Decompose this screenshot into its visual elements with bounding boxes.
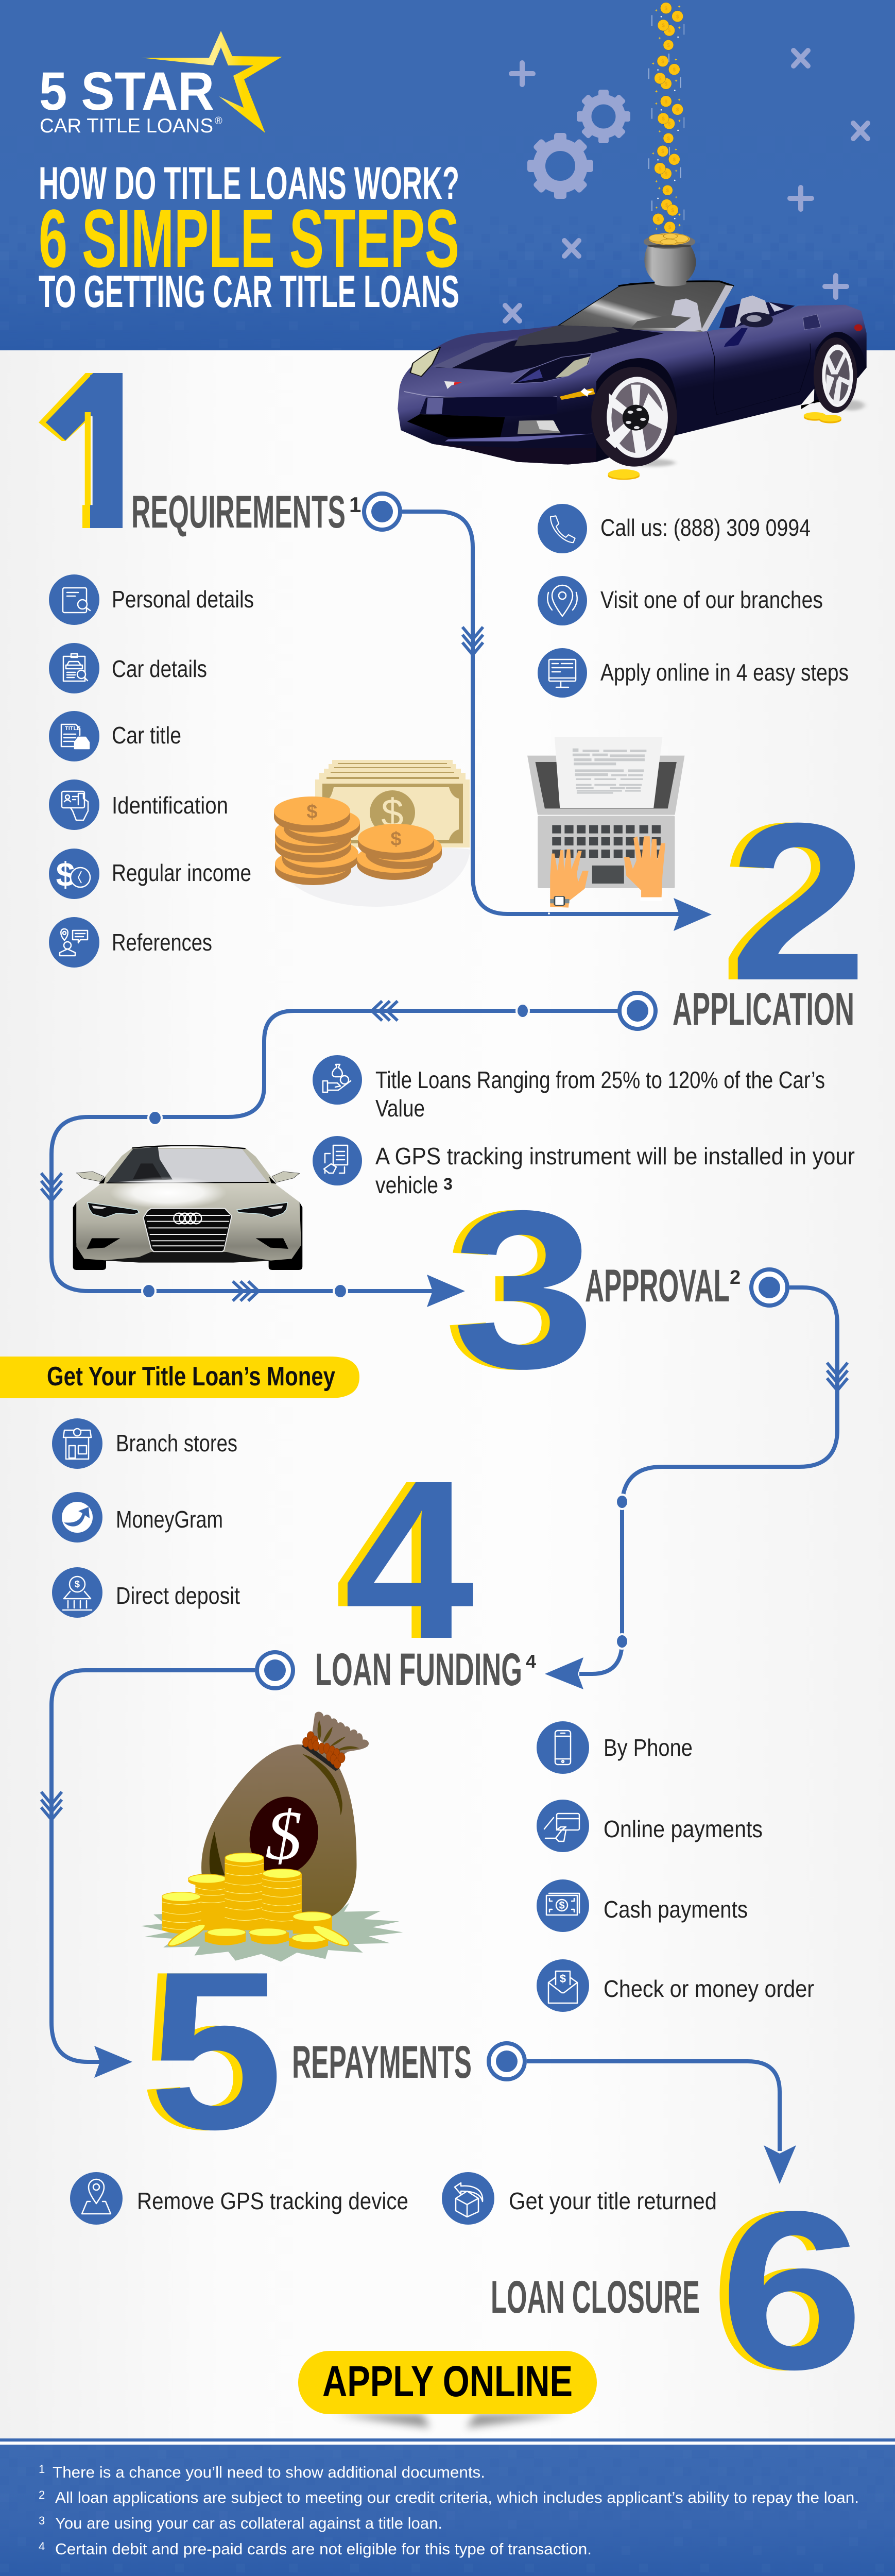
coin dollar signs: $ <box>668 28 671 34</box>
windshield <box>107 1149 268 1182</box>
path dots <box>142 1004 529 1298</box>
item: remove GPS <box>70 2172 408 2225</box>
rope <box>302 1732 345 1771</box>
heading: repayments: REPAYMENTS <box>292 2036 472 2088</box>
button: apply online <box>298 2351 597 2428</box>
item: references: References <box>112 929 212 956</box>
big number 2: 2 <box>729 776 868 1027</box>
heading: loan closure: LOAN CLOSURE <box>491 2271 700 2323</box>
sack body <box>201 1744 356 1923</box>
item: regular income <box>49 849 251 899</box>
ring marker <box>751 1269 787 1306</box>
heading: requirements: 1 <box>349 493 361 517</box>
title: TO GETTING CAR TITLE LOANS <box>39 266 459 317</box>
coin dollar signs <box>657 6 679 231</box>
illustration: cash and coin stacks <box>274 760 470 907</box>
coin dollar signs: $ <box>665 6 668 11</box>
logo wordmark: 5 STAR <box>39 61 214 122</box>
panel: closure steps <box>70 2172 717 2225</box>
coins right stack: $ <box>390 828 402 850</box>
decorative plus and x marks <box>505 50 868 321</box>
illustration: coins falling into pot <box>648 3 684 233</box>
coin stacks <box>162 1853 351 1950</box>
item: regular income: Regular income <box>112 859 251 886</box>
item: direct deposit: Direct deposit <box>116 1582 240 1609</box>
chin splitter <box>445 434 593 442</box>
big number 6: 6 <box>719 2164 864 2417</box>
coin dollar signs: $ <box>666 188 669 194</box>
front wheel <box>591 367 677 467</box>
banner: get your title loan's money: Get Your Title Loan’s Money <box>47 1362 335 1392</box>
icon: logo star <box>141 31 282 133</box>
coin dollar signs: $ <box>665 99 668 105</box>
door handle <box>803 314 821 330</box>
coin dollar signs: $ <box>673 67 676 73</box>
grille <box>143 1209 232 1251</box>
item: GPS tracking: vehicle <box>375 1172 438 1198</box>
footnote 3: You are using your car as collateral against a title loan. <box>55 2514 442 2532</box>
item: branch stores <box>52 1418 237 1469</box>
emblem <box>444 381 462 389</box>
front wheel arch <box>596 358 677 462</box>
item: visit branches <box>538 576 823 625</box>
left headlight <box>410 347 440 377</box>
panel: requirements list <box>49 574 254 968</box>
item: online payments: Online payments <box>604 1816 763 1842</box>
item: apply online <box>538 648 849 698</box>
paper <box>555 737 662 808</box>
rear wheel <box>814 337 857 413</box>
item: car title: Car title <box>112 722 181 749</box>
big number 4: 4 <box>344 1433 476 1686</box>
item: title returned: Get your title returned <box>509 2188 717 2214</box>
banknotes: $ <box>381 790 404 836</box>
footer rule <box>0 2438 895 2442</box>
dollar label <box>241 1790 326 1882</box>
coin dollar signs: $ <box>667 136 670 142</box>
mirrors <box>76 1172 300 1183</box>
button: apply online: APPLY ONLINE <box>322 2357 573 2405</box>
footnote 1: There is a chance you’ll need to show additional documents. <box>53 2463 485 2481</box>
wristwatch <box>550 896 570 905</box>
item: car title <box>49 711 181 761</box>
item: call us <box>538 504 811 553</box>
panel: repayment options <box>537 1721 814 2012</box>
icon: gears <box>527 90 630 199</box>
wheels <box>73 1202 302 1270</box>
heading: approval <box>585 1260 741 1311</box>
item: apply online: Apply online in 4 easy steps <box>600 659 849 686</box>
big number 2: 2 <box>720 776 858 1027</box>
coin dollar signs: $ <box>673 157 676 163</box>
button shadow <box>335 2414 566 2428</box>
big number 5: 5 <box>149 1925 283 2176</box>
coin dollar signs: $ <box>676 14 679 20</box>
heading: loan funding: 4 <box>526 1651 536 1672</box>
connector: application to approval <box>41 993 656 1307</box>
banner: get your title loan's money <box>0 1357 359 1398</box>
coins left stack <box>274 796 360 885</box>
coin dollar signs: $ <box>668 225 672 231</box>
icon: dollar and clock: $ <box>56 855 75 893</box>
big number 6: 6 <box>710 2164 855 2417</box>
heading: requirements <box>131 486 361 537</box>
door line <box>708 332 811 415</box>
big number 1: 1 <box>36 325 170 577</box>
interior <box>719 302 795 328</box>
connector: loan funding to repayments <box>41 1652 293 2078</box>
title: HOW DO TITLE LOANS WORK? <box>39 157 459 209</box>
item: personal details <box>49 574 254 625</box>
ring marker <box>489 2043 525 2079</box>
fog light <box>518 420 561 434</box>
item: direct deposit: $ <box>75 1579 80 1589</box>
coin dollar signs: $ <box>672 208 675 214</box>
panel: funding options <box>52 1418 240 1618</box>
mirror <box>724 328 748 347</box>
footer panel <box>0 2445 895 2576</box>
coin dollar signs: $ <box>662 116 665 122</box>
ring marker <box>257 1652 293 1688</box>
illustration: laptop with hands <box>527 737 684 908</box>
hood highlight <box>110 1176 227 1209</box>
logo: 5 Star Car Title Loans <box>39 31 282 137</box>
item: car details <box>49 643 207 693</box>
tail light <box>854 324 863 331</box>
path dots <box>616 1495 628 1649</box>
right headlight <box>511 353 592 384</box>
big number 3: 3 <box>452 1163 595 1415</box>
body <box>76 1182 301 1262</box>
item: moneygram <box>52 1492 223 1543</box>
item: check or money order: Check or money order <box>604 1975 814 2002</box>
coin dollar signs: $ <box>661 149 664 155</box>
indicator <box>559 388 595 400</box>
item: cash payments: $ <box>559 1900 565 1911</box>
coin dollar signs: $ <box>668 122 671 127</box>
item: title loan range <box>313 1055 825 1122</box>
connector: requirements to application <box>364 494 712 931</box>
heading: loan funding: LOAN FUNDING <box>315 1643 522 1695</box>
coins left stack: $ <box>306 801 318 823</box>
panel: application options <box>538 504 849 698</box>
registered mark: ® <box>215 115 222 127</box>
logo tagline: CAR TITLE LOANS <box>40 115 213 137</box>
item: check or money order <box>537 1959 814 2012</box>
item: by phone: By Phone <box>604 1734 693 1761</box>
roof and pillars <box>99 1148 277 1184</box>
coin dollar signs: $ <box>662 23 665 29</box>
coin dollar signs: $ <box>659 166 662 172</box>
windshield <box>559 281 733 333</box>
coin dollar signs: $ <box>657 217 660 223</box>
footnote 2: 2 <box>39 2488 45 2501</box>
item: car title: TITLE <box>65 725 81 732</box>
header band <box>0 0 895 350</box>
burst <box>141 1903 403 1962</box>
lower lip <box>103 1252 271 1263</box>
footnote 3: 3 <box>39 2514 45 2527</box>
big number 3: 3 <box>444 1163 587 1415</box>
big number 1: 1 <box>28 325 163 577</box>
item: branch stores: Branch stores <box>116 1430 237 1456</box>
coin dollar signs: $ <box>661 59 664 64</box>
numeral flag shading <box>39 373 93 441</box>
coin dollar signs: $ <box>676 107 679 113</box>
coin dollar signs: $ <box>667 43 670 48</box>
headlights <box>88 1202 287 1217</box>
coins right stack <box>357 824 442 880</box>
item: call us: Call us: (888) 309 0994 <box>600 514 811 541</box>
illustration: convertible car <box>398 233 867 480</box>
footnote 1: 1 <box>39 2463 45 2476</box>
heading: requirements: REQUIREMENTS <box>131 486 346 537</box>
item: visit branches: Visit one of our branches <box>600 586 823 613</box>
item: references <box>49 917 212 968</box>
panel: approval details <box>313 1055 855 1198</box>
icon: dollar and clock <box>56 855 90 893</box>
item: GPS tracking <box>313 1136 855 1198</box>
item: cash payments: Cash payments <box>604 1896 748 1923</box>
rear wheel arch <box>814 332 867 403</box>
item: cash payments <box>537 1879 748 1932</box>
nose highlight <box>404 392 557 401</box>
illustration: money bag with coins <box>141 1711 403 1962</box>
ring marker <box>364 494 400 530</box>
footnote 2: All loan applications are subject to meeting our credit criteria, which includes applicant’s ability to repay the loan. <box>55 2488 859 2506</box>
hood stripes <box>436 326 664 372</box>
connector: repayments to loan closure <box>489 2043 796 2184</box>
item: personal details: Personal details <box>112 586 254 613</box>
footnote 4: Certain debit and pre-paid cards are not eligible for this type of transaction. <box>55 2540 592 2558</box>
item: remove GPS: Remove GPS tracking device <box>137 2188 408 2214</box>
coin dollar signs: $ <box>665 202 668 208</box>
footnote 4: 4 <box>39 2540 45 2553</box>
item: GPS tracking: 3 <box>443 1175 453 1193</box>
big number 5: 5 <box>140 1925 274 2176</box>
connector: approval to loan funding <box>545 1269 848 1689</box>
heading: approval: 2 <box>730 1267 741 1289</box>
coin dollar signs: $ <box>665 81 668 87</box>
item: direct deposit <box>52 1567 240 1618</box>
grille mouth <box>407 414 505 437</box>
heading: loan funding <box>315 1643 536 1695</box>
item: online payments <box>537 1800 763 1852</box>
item: identification <box>49 779 228 830</box>
illustration: money bag with coins: $ <box>265 1797 302 1875</box>
item: identification: Identification <box>112 792 228 819</box>
loose coins <box>608 412 841 480</box>
item: by phone <box>537 1721 693 1774</box>
coin dollar signs: $ <box>665 172 668 177</box>
seats <box>670 298 702 333</box>
wheel shadows <box>631 400 864 467</box>
car body <box>398 305 867 465</box>
big number 1 <box>39 373 123 528</box>
item: title loan range: Value <box>375 1095 425 1122</box>
air intakes <box>87 1238 288 1249</box>
keyboard base <box>538 816 675 888</box>
sack neck <box>312 1711 369 1757</box>
item: car details: Car details <box>112 655 207 682</box>
big number 4: 4 <box>335 1433 467 1686</box>
title: 6 SIMPLE STEPS <box>39 192 459 284</box>
title <box>39 157 459 317</box>
front bumper band <box>420 397 557 417</box>
item: title returned <box>442 2172 717 2225</box>
illustration: front view of silver sedan <box>73 1146 302 1270</box>
ring marker <box>619 993 656 1029</box>
banknotes <box>315 760 470 848</box>
item: check or money order: $ <box>560 1972 566 1985</box>
pot of gold <box>644 233 696 286</box>
coins <box>652 3 683 233</box>
item: moneygram: MoneyGram <box>116 1506 223 1533</box>
icon: moneygram globe <box>62 1502 93 1533</box>
coin dollar signs: $ <box>659 76 662 82</box>
plate <box>283 848 470 907</box>
heading: approval: APPROVAL <box>585 1260 730 1311</box>
hands <box>550 836 665 908</box>
item: GPS tracking: A GPS tracking instrument will be installed in your <box>375 1143 855 1170</box>
